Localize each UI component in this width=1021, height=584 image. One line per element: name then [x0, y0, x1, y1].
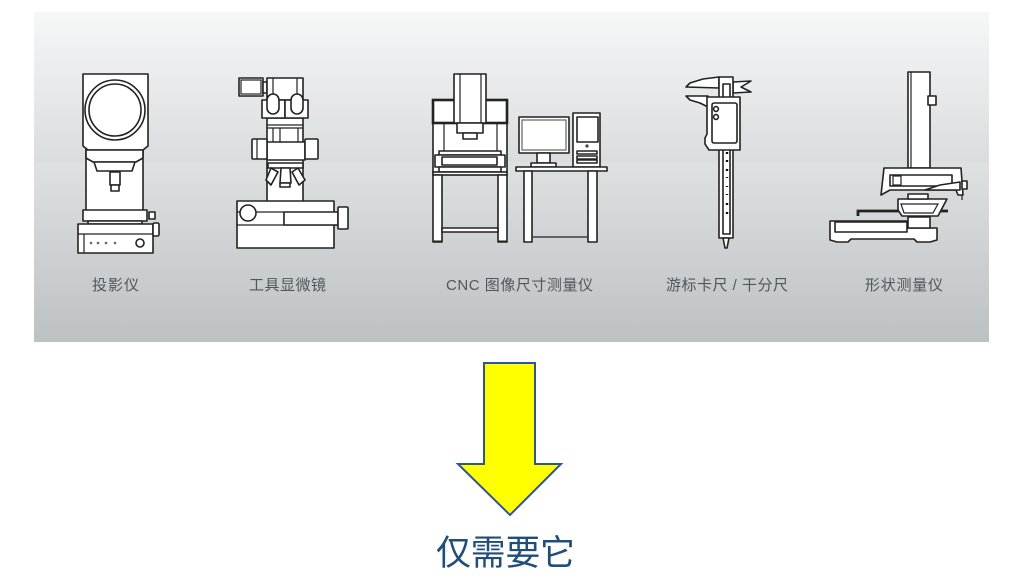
- icon: vernier caliper: [686, 77, 751, 248]
- label: caliper and micrometer: 游标卡尺 / 干分尺: [666, 277, 788, 294]
- label: tool microscope: 工具显微镜: [249, 276, 326, 294]
- icon: form measuring instrument: [830, 72, 967, 242]
- icon: profile projector: [78, 74, 159, 253]
- conclusion text: 仅需要它: [436, 534, 575, 573]
- icon: tool microscope: [237, 78, 348, 248]
- label: CNC vision measuring machine: CNC 图像尺寸测量仪: [446, 277, 593, 294]
- label: profile projector: 投影仪: [92, 277, 139, 294]
- arrow: down: [458, 363, 561, 515]
- icon: CNC vision measuring machine: [433, 74, 607, 242]
- label: form measuring instrument: 形状测量仪: [865, 277, 943, 294]
- panel: instrument background: [34, 12, 989, 342]
